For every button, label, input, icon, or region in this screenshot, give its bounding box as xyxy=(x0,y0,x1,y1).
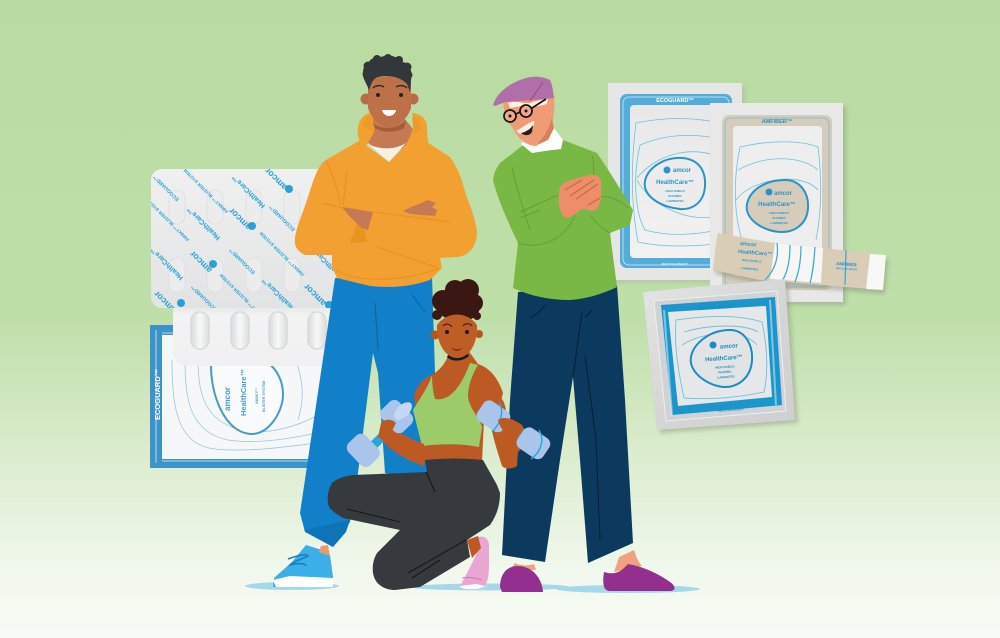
foil print pattern: amcor xyxy=(151,289,178,315)
older man's sweater xyxy=(493,140,633,300)
foil print pattern: amcor xyxy=(301,282,328,308)
foil print pattern: ECOGUARD™ xyxy=(190,284,218,312)
foil print pattern: AMSKY™ BLISTER SYSTEM xyxy=(182,168,229,214)
blister tray with pill cavities xyxy=(173,300,340,366)
carton brand text: AMSKY™ xyxy=(255,387,259,404)
foil print pattern: AMSKY™ BLISTER SYSTEM xyxy=(143,196,190,242)
woman's arms xyxy=(378,394,530,469)
woman's neck and choker xyxy=(447,353,469,361)
foil print pattern: HealthCare™ xyxy=(261,276,297,312)
sachet labels: LAMINATES xyxy=(666,199,684,203)
carton contour lines xyxy=(172,360,340,450)
woman's green top xyxy=(413,363,482,447)
foil print pattern: HealthCare™ xyxy=(231,173,267,209)
tube labels: HIGH SHIELD xyxy=(742,258,762,264)
sachet labels: LAMINATES xyxy=(717,374,735,380)
older man's hands xyxy=(559,175,601,217)
tube labels: RECYCLE READY xyxy=(836,267,858,272)
sachet labels xyxy=(698,304,744,413)
sachet labels: PHARMA xyxy=(718,369,732,374)
foil print pattern: ECOGUARD™ xyxy=(268,204,296,232)
foil print pattern: amcor xyxy=(262,166,289,192)
dumbbell right xyxy=(474,398,553,462)
panel: pharma laminate sachets xyxy=(608,83,888,433)
carton brand text xyxy=(223,369,266,416)
foil print pattern: HealthCare™ xyxy=(186,205,222,241)
tube labels: amcor xyxy=(740,241,758,249)
man's hoodie xyxy=(295,112,477,287)
sachet labels: RECYCLE READY xyxy=(662,262,688,266)
glasses xyxy=(504,99,546,122)
older man's shoes xyxy=(500,550,674,592)
foil print pattern: ECOGUARD™ xyxy=(228,247,256,275)
sachet logo outline xyxy=(645,158,705,209)
sachet labels: PHARMA xyxy=(668,194,682,198)
sachet labels: HIGH SHIELD xyxy=(665,189,685,193)
sachet labels: HIGH SHIELD xyxy=(769,211,789,215)
floor shadows xyxy=(245,582,700,593)
tube labels: HealthCare™ xyxy=(738,249,773,258)
sachet labels xyxy=(656,98,694,266)
sachet labels: HealthCare™ xyxy=(656,179,694,186)
carton brand text: BLISTER SYSTEM xyxy=(262,381,266,412)
woman's torso skin xyxy=(414,350,503,462)
woman's ankle xyxy=(467,536,481,558)
figure: young man in orange hoodie xyxy=(273,54,477,587)
sachet labels: AMFIBER™ xyxy=(762,119,792,125)
blister foil back xyxy=(151,169,337,308)
tube labels: LAMINATES xyxy=(741,266,758,272)
sachet: Amfiber beige xyxy=(710,103,846,305)
right hand xyxy=(498,418,523,437)
foil print pattern xyxy=(151,169,336,308)
woman's leggings xyxy=(328,458,500,590)
man's head xyxy=(360,54,418,132)
foil print pattern: HealthCare™ xyxy=(149,245,185,281)
older man's head xyxy=(493,77,554,146)
woman's face xyxy=(430,314,483,358)
sachet labels: PHARMA xyxy=(772,216,786,220)
sachet labels xyxy=(758,119,796,225)
sachet labels: amcor xyxy=(720,343,739,351)
woman's pink shoe xyxy=(460,537,489,589)
sachet logo outline xyxy=(747,180,808,232)
foil print pattern: AMSKY™ BLISTER SYSTEM xyxy=(218,273,265,319)
sachet labels: amcor xyxy=(673,168,692,174)
dumbbell left xyxy=(344,397,416,470)
sachet labels: ECOGUARD™ xyxy=(656,98,694,104)
sachet labels: HIGH SHIELD xyxy=(715,364,736,370)
stick pack tube xyxy=(713,233,888,294)
older man's collar xyxy=(521,128,563,153)
man's sneaker xyxy=(273,545,333,587)
sachet labels: RECYCLE READY xyxy=(718,407,744,413)
man's forearms xyxy=(342,200,437,230)
older man's trousers xyxy=(502,285,633,563)
man's blue trousers xyxy=(300,276,441,547)
foil print pattern: HealthCare™ xyxy=(308,243,344,279)
figure: woman with dumbbells xyxy=(328,279,553,590)
left hand xyxy=(378,420,396,442)
carton side label: ECOGUARD™ xyxy=(153,369,162,420)
man's neck xyxy=(365,118,418,160)
sachet labels: HealthCare™ xyxy=(758,201,796,208)
sachet: Ecoguard foil xyxy=(643,279,798,433)
foil print pattern: amcor xyxy=(226,206,253,232)
sachet labels: HealthCare™ xyxy=(705,354,743,363)
tube labels xyxy=(738,241,858,272)
figure: older man in green sweater xyxy=(493,77,674,592)
sachet labels: LAMINATES xyxy=(770,221,788,225)
sachet labels: amcor xyxy=(774,191,793,197)
blister carton xyxy=(150,325,340,468)
man's t-shirt collar xyxy=(368,143,406,162)
foil print pattern: ECOGUARD™ xyxy=(152,174,180,202)
carton brand text: amcor xyxy=(223,387,232,411)
foil print pattern: AMSKY™ BLISTER SYSTEM xyxy=(258,231,305,277)
sachet logo outline xyxy=(691,330,752,387)
panel: blister pack products xyxy=(143,166,344,468)
foil print pattern: amcor xyxy=(187,249,214,275)
woman's hair xyxy=(432,279,483,320)
carton logo blob xyxy=(211,358,283,434)
sachet labels: ECOGUARD™ xyxy=(698,304,736,312)
sachet: Ecoguard blue xyxy=(608,83,745,283)
tube labels: AMFIBER xyxy=(836,261,857,267)
carton brand text: HealthCare™ xyxy=(239,369,248,416)
